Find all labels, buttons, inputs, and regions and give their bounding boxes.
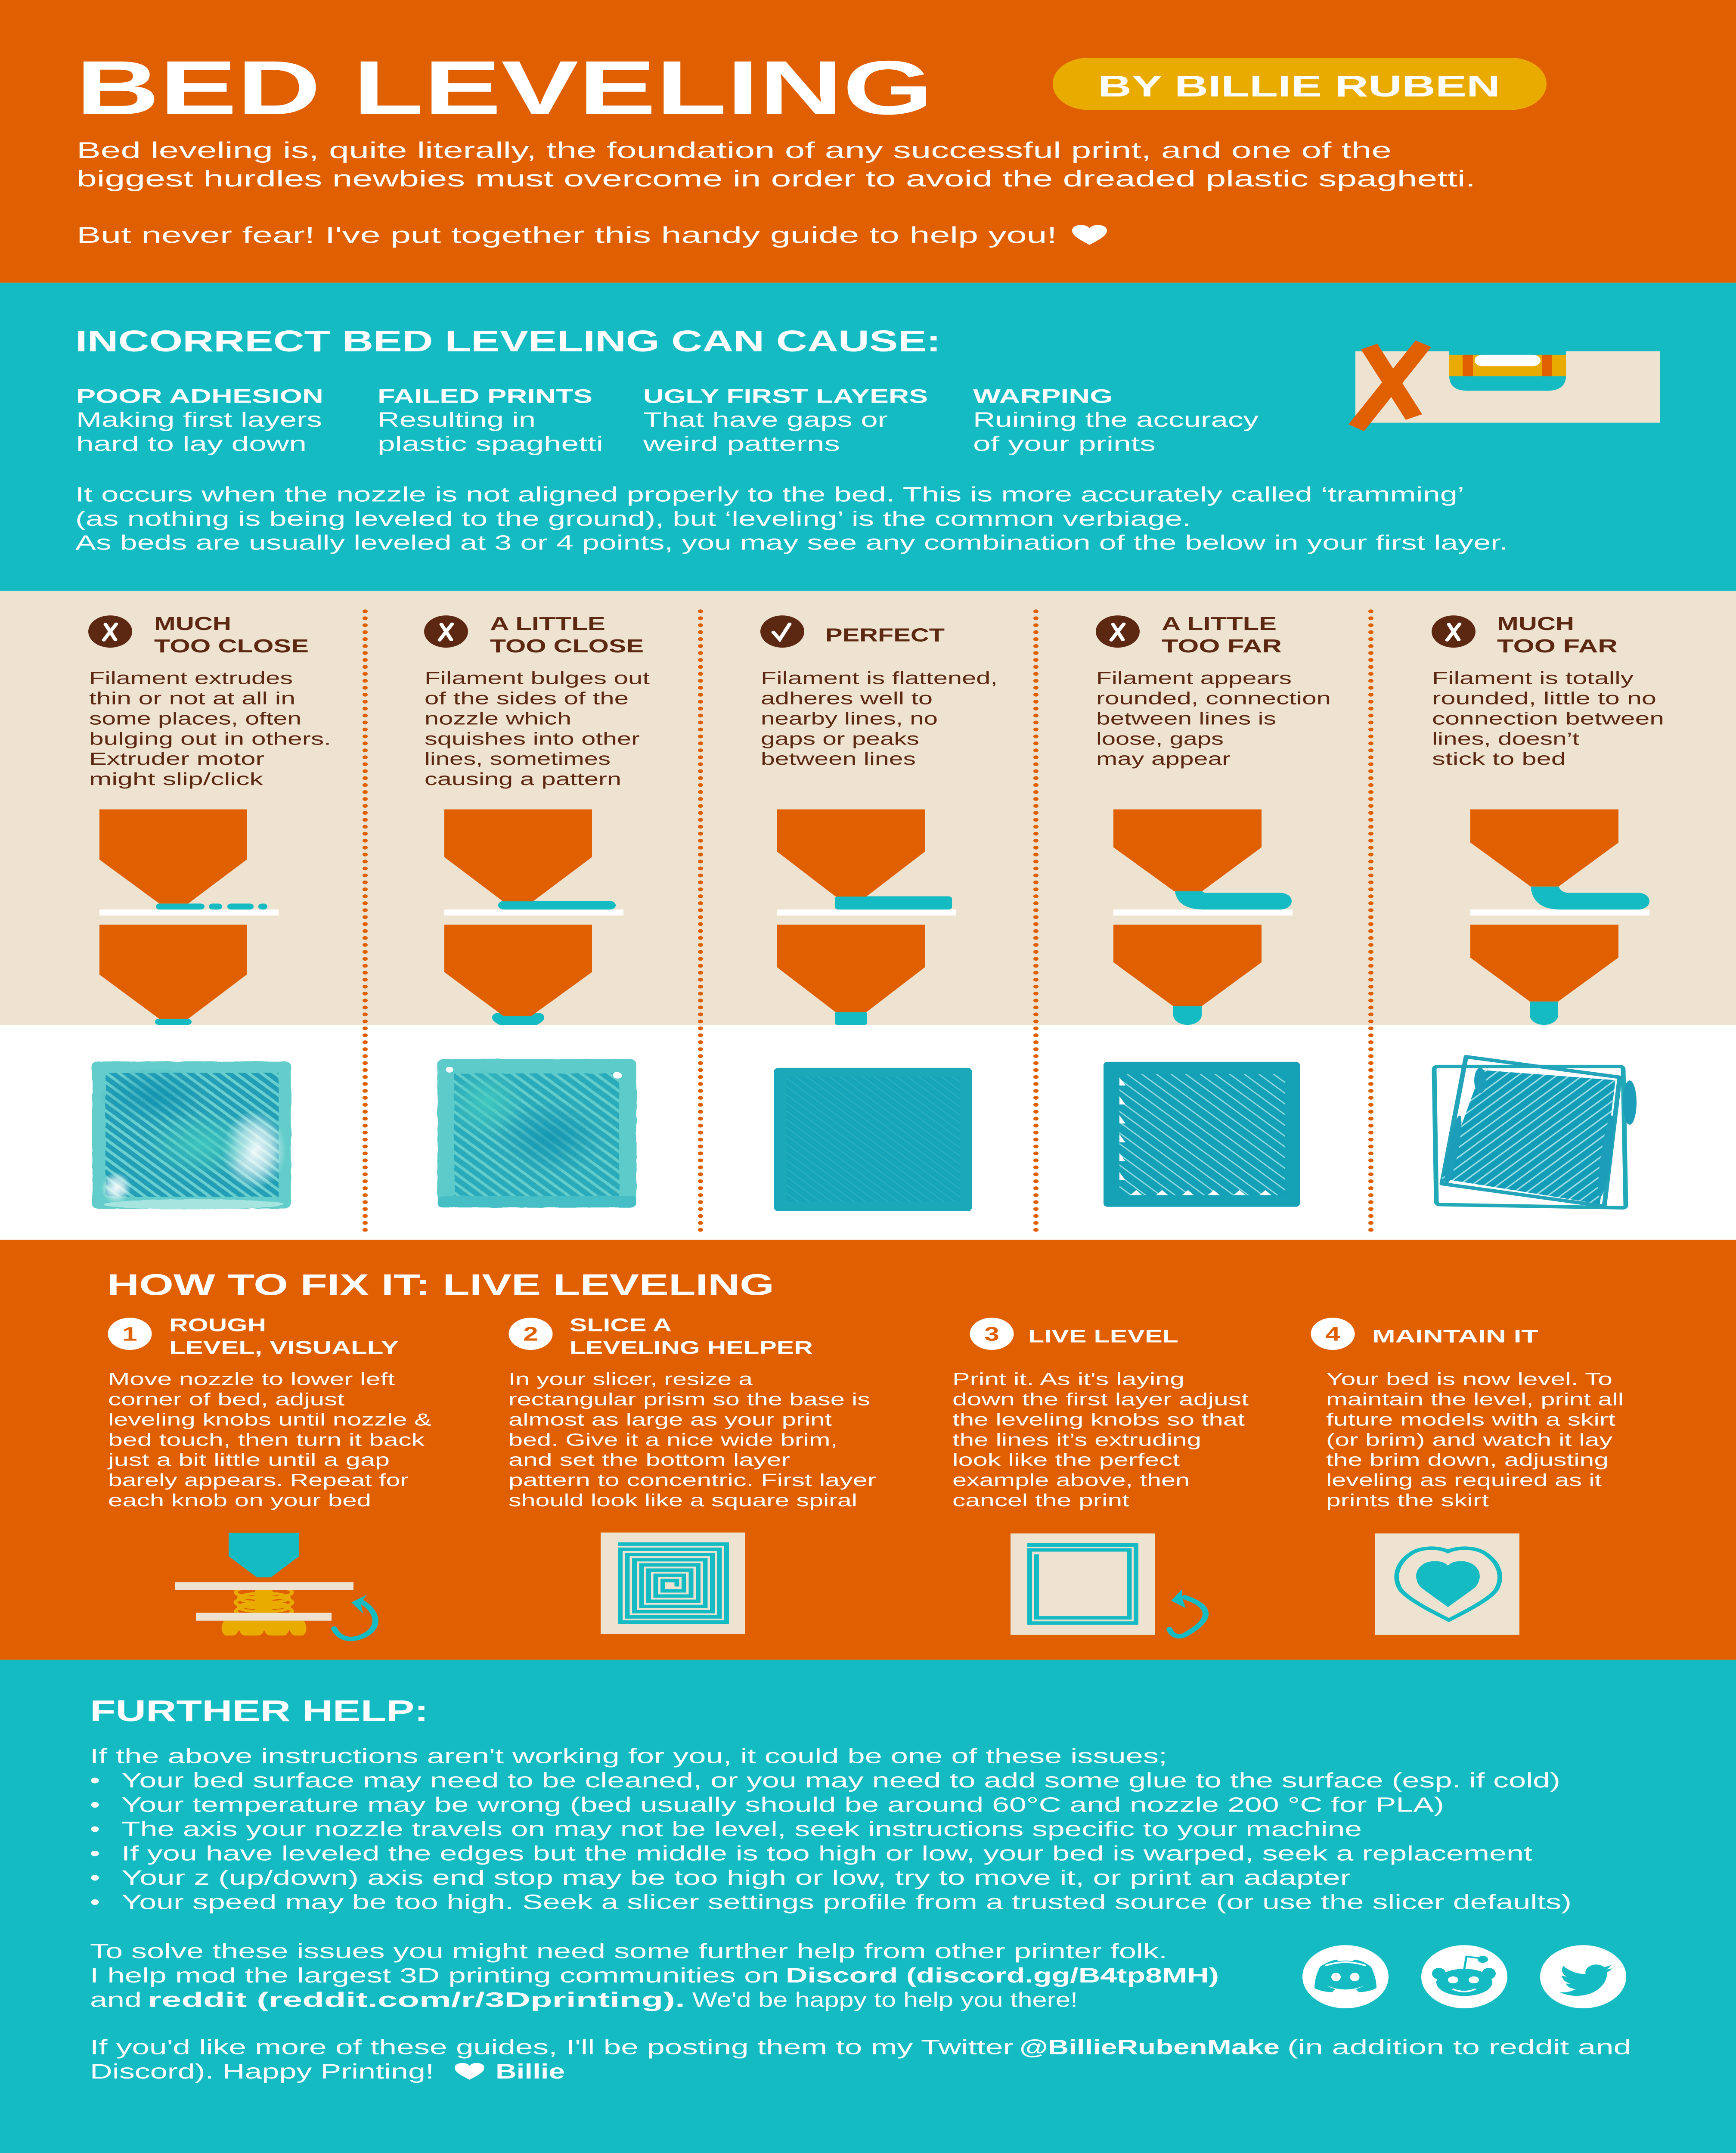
step 1 text	[107, 1369, 431, 1510]
step 1	[107, 1315, 431, 1639]
description: Filament is flattened,	[761, 668, 998, 688]
explanation paragraph: It occurs when the nozzle is not aligned properly to the bed. This is more accurately called ‘tramming’	[75, 483, 1464, 506]
cause: poor adhesion	[76, 385, 323, 456]
community text: I help mod the largest 3D printing communities on	[90, 1964, 779, 1987]
description	[1096, 668, 1331, 769]
step 2 text	[508, 1369, 876, 1510]
step 2	[508, 1315, 876, 1634]
step 1 text: leveling knobs until nozzle &	[108, 1410, 431, 1430]
step 4 text: leveling as required as it	[1326, 1470, 1602, 1490]
troubleshooting list: Your bed surface may need to be cleaned, or you may need to add some glue to the surface (esp. if cold)	[121, 1769, 1560, 1792]
step 4 text: prints the skirt	[1326, 1491, 1489, 1510]
heading	[1162, 613, 1282, 657]
community text: Discord (discord.gg/B4tp8MH)	[786, 1964, 1219, 1987]
diagram: side view extruding	[444, 810, 623, 915]
author badge: BY BILLIE RUBEN	[1098, 69, 1500, 103]
closing text: Billie	[496, 2060, 565, 2083]
description: squishes into other	[425, 729, 640, 748]
step 4 text	[1326, 1369, 1624, 1510]
intro text: Bed leveling is, quite literally, the foundation of any successful print, and one of the	[77, 138, 1392, 163]
troubleshooting list: •	[90, 1818, 100, 1841]
explanation paragraph	[75, 483, 1508, 554]
step 3 text: Print it. As it's laying	[952, 1369, 1184, 1389]
step 3 text: down the first layer adjust	[952, 1390, 1249, 1409]
panel: header	[76, 45, 1547, 248]
heading: TOO CLOSE	[154, 636, 309, 657]
description: might slip/click	[89, 769, 264, 789]
icon: small heart	[455, 2063, 484, 2080]
description: of the sides of the	[425, 689, 629, 708]
closing text: @BillieRubenMake	[1020, 2036, 1280, 2059]
cause: poor adhesion: POOR ADHESION	[76, 385, 323, 407]
diagram: front view	[777, 924, 925, 1025]
icon: first layer outline	[1011, 1533, 1155, 1635]
step 3 text	[952, 1369, 1249, 1510]
diagram: front view	[1113, 924, 1262, 1025]
panel: incorrect leveling causes	[75, 324, 1660, 554]
description: rounded, connection	[1096, 689, 1331, 708]
step 4 text: the brim down, adjusting	[1326, 1450, 1609, 1470]
step 3 heading: LIVE LEVEL	[1028, 1326, 1178, 1346]
heading: A LITTLE	[1162, 613, 1277, 634]
step 1 heading: LEVEL, VISUALLY	[169, 1337, 399, 1358]
cause: poor adhesion: Making first layers	[76, 409, 322, 431]
description: stick to bed	[1432, 749, 1566, 769]
title: BED LEVELING	[76, 45, 933, 130]
dotted column dividers	[365, 611, 1371, 1233]
intro text: biggest hurdles newbies must overcome in order to avoid the dreaded plastic spaghetti.	[77, 166, 1476, 192]
troubleshooting list: •	[90, 1842, 100, 1865]
step 4 heading: MAINTAIN IT	[1372, 1326, 1538, 1346]
photo: much too far print	[1434, 1057, 1637, 1208]
description	[761, 668, 998, 769]
description: causing a pattern	[425, 769, 621, 789]
cause: failed prints: Resulting in	[378, 409, 536, 431]
description: Extruder motor	[89, 749, 264, 769]
heading: MUCH	[1497, 613, 1574, 634]
step 3 number	[970, 1318, 1014, 1350]
step 2 text: almost as large as your print	[508, 1410, 832, 1430]
step 2 number: 2	[523, 1323, 538, 1345]
heading	[154, 613, 309, 657]
cause: failed prints: FAILED PRINTS	[378, 385, 592, 407]
description: lines, doesn’t	[1432, 729, 1579, 748]
description: Filament bulges out	[425, 668, 650, 688]
step 2 text: In your slicer, resize a	[508, 1369, 753, 1389]
cause: warping: of your prints	[973, 432, 1156, 456]
icons: twitter	[1540, 1945, 1626, 2008]
intro text	[77, 138, 1476, 248]
icon: leveling knob under nozzle	[175, 1533, 353, 1635]
description: nearby lines, no	[761, 709, 938, 729]
icon: heart skirt	[1375, 1533, 1519, 1635]
icon: square spiral skirt	[601, 1533, 745, 1634]
arrow: turn knob	[1169, 1589, 1206, 1636]
cause: warping: Ruining the accuracy	[973, 409, 1259, 431]
step 2 text: and set the bottom layer	[508, 1450, 790, 1470]
cause: failed prints: plastic spaghetti	[378, 432, 603, 456]
heading	[1497, 613, 1618, 657]
author badge	[1053, 58, 1547, 110]
description: bulging out in others.	[89, 729, 331, 748]
step 2 heading: SLICE A	[570, 1315, 672, 1335]
closing text: Discord). Happy Printing!	[90, 2060, 434, 2083]
description: nozzle which	[425, 709, 571, 729]
heading: causes: INCORRECT BED LEVELING CAN CAUSE:	[75, 324, 941, 358]
cause: ugly first layers: weird patterns	[643, 432, 840, 456]
step 3 number: 3	[984, 1323, 999, 1345]
troubleshooting list: If you have leveled the edges but the middle is too high or low, your bed is warped, seek a replacement	[121, 1842, 1532, 1865]
step 2 text: bed. Give it a nice wide brim,	[508, 1430, 837, 1450]
closing text	[90, 2036, 1631, 2083]
heading: MUCH	[154, 613, 231, 634]
community text	[90, 1940, 1219, 2011]
step 2 text: rectangular prism so the base is	[508, 1390, 870, 1409]
step 1 text: corner of bed, adjust	[108, 1390, 344, 1409]
icon: cross badge	[1096, 615, 1140, 648]
heading: TOO FAR	[1162, 636, 1282, 657]
cause: ugly first layers: That have gaps or	[643, 409, 888, 431]
diagram: side view extruding	[1113, 810, 1293, 915]
step 3 text: cancel the print	[952, 1491, 1129, 1510]
icon: cross badge	[88, 615, 132, 648]
icons: discord	[1302, 1945, 1389, 2008]
step 3 text: look like the perfect	[952, 1450, 1180, 1470]
description: gaps or peaks	[761, 729, 919, 748]
troubleshooting list: Your temperature may be wrong (bed usually should be around 60°C and nozzle 200 °C for PLA)	[121, 1793, 1444, 1817]
troubleshooting list: •	[90, 1769, 100, 1792]
heading: how to fix it: HOW TO FIX IT: LIVE LEVELING	[107, 1268, 774, 1301]
explanation paragraph: (as nothing is being leveled to the ground), but ‘leveling’ is the common verbiage.	[75, 507, 1191, 530]
cause: ugly first layers	[643, 385, 928, 456]
description	[1432, 668, 1664, 769]
cause: failed prints	[378, 385, 603, 456]
cause: poor adhesion: hard to lay down	[76, 432, 307, 456]
cause: warping	[973, 385, 1259, 456]
step 1 heading: ROUGH	[169, 1315, 266, 1335]
step 1 heading	[169, 1315, 399, 1358]
step 2 number	[509, 1318, 553, 1350]
diagram: front view	[99, 924, 247, 1025]
heading	[490, 613, 644, 657]
step 1 text: just a bit little until a gap	[107, 1450, 390, 1470]
photo: a little too far print	[1104, 1062, 1300, 1207]
step 4 number	[1311, 1318, 1355, 1350]
heading: TOO FAR	[1497, 636, 1618, 657]
photo: a little too close print	[437, 1059, 636, 1207]
step 4 text: maintain the level, print all	[1326, 1390, 1624, 1409]
step 2 text: should look like a square spiral	[508, 1491, 857, 1510]
step 4	[1311, 1318, 1624, 1635]
description: may appear	[1096, 749, 1231, 769]
step 2 heading	[570, 1315, 813, 1358]
troubleshooting list: •	[90, 1891, 100, 1914]
diagram: side view extruding	[99, 810, 279, 915]
closing text: (in addition to reddit and	[1287, 2036, 1631, 2059]
step 3 text: the lines it’s extruding	[952, 1430, 1201, 1450]
panel: further help	[90, 1694, 1631, 2083]
step 1 text: Move nozzle to lower left	[108, 1369, 395, 1389]
cause: ugly first layers: UGLY FIRST LAYERS	[643, 385, 928, 407]
step 4 number: 4	[1325, 1323, 1340, 1345]
step 4 text: Your bed is now level. To	[1326, 1369, 1612, 1389]
description: Filament is totally	[1432, 668, 1634, 688]
diagram: front view	[444, 924, 592, 1025]
step 1 text: bed touch, then turn it back	[108, 1430, 425, 1450]
description: connection between	[1432, 709, 1664, 729]
icon: crossed out spirit level	[1355, 344, 1660, 428]
diagram: front view	[1470, 924, 1618, 1025]
step 4 text: (or brim) and watch it lay	[1326, 1430, 1613, 1450]
troubleshooting list: •	[90, 1793, 100, 1817]
icon: cross badge	[424, 615, 468, 648]
description: rounded, little to no	[1432, 689, 1656, 708]
panel: much too close	[88, 613, 331, 1025]
step 1 text: each knob on your bed	[108, 1491, 371, 1510]
description: lines, sometimes	[425, 749, 611, 769]
description: thin or not at all in	[89, 689, 295, 708]
heading: further help: FURTHER HELP:	[90, 1694, 428, 1728]
description: between lines is	[1096, 709, 1276, 729]
photo: perfect print	[774, 1068, 972, 1211]
step 3	[952, 1318, 1249, 1636]
panel: how to fix it	[107, 1268, 1624, 1639]
panel: a little too close	[424, 613, 650, 1025]
icons: reddit	[1421, 1945, 1507, 2008]
cause: warping: WARPING	[973, 385, 1113, 407]
description	[425, 668, 650, 789]
panel: much too far	[1432, 613, 1664, 1025]
heading: PERFECT	[825, 624, 945, 645]
heading: TOO CLOSE	[490, 636, 644, 657]
description	[89, 668, 331, 789]
troubleshooting list: The axis your nozzle travels on may not be level, seek instructions specific to your machine	[121, 1818, 1362, 1841]
step 4 text: future models with a skirt	[1326, 1410, 1615, 1430]
closing text: If you'd like more of these guides, I'll be posting them to my Twitter	[90, 2036, 1014, 2059]
step 3 text: example above, then	[952, 1470, 1190, 1490]
icon: heart	[1072, 225, 1107, 245]
troubleshooting list: •	[90, 1866, 100, 1889]
icon: check badge	[760, 615, 804, 648]
diagram: side view extruding	[1470, 810, 1649, 915]
arrow: turn knob	[334, 1595, 375, 1639]
intro text: But never fear! I've put together this handy guide to help you!	[77, 223, 1057, 248]
community text: and	[90, 1989, 142, 2011]
step 2 heading: LEVELING HELPER	[570, 1337, 813, 1358]
step 2 text: pattern to concentric. First layer	[508, 1470, 876, 1490]
community text: We'd be happy to help you there!	[692, 1989, 1078, 2011]
diagram: side view extruding	[777, 810, 956, 915]
explanation paragraph: As beds are usually leveled at 3 or 4 points, you may see any combination of the below in your first layer.	[75, 531, 1508, 554]
community text: To solve these issues you might need some further help from other printer folk.	[90, 1940, 1167, 1963]
panel: a little too far	[1096, 613, 1331, 1025]
description: adheres well to	[761, 689, 933, 708]
troubleshooting list: Your speed may be too high. Seek a slicer settings profile from a trusted source (or use the slicer defaults)	[121, 1891, 1572, 1914]
description: Filament extrudes	[89, 668, 293, 688]
troubleshooting list: If the above instructions aren't working for you, it could be one of these issues;	[90, 1745, 1167, 1768]
step 3 text: the leveling knobs so that	[952, 1410, 1245, 1430]
panel: perfect	[760, 615, 998, 1025]
description: loose, gaps	[1096, 729, 1224, 748]
step 1 text: barely appears. Repeat for	[108, 1470, 409, 1490]
troubleshooting list	[90, 1745, 1572, 1914]
heading: A LITTLE	[490, 613, 605, 634]
step 1 number: 1	[122, 1323, 137, 1345]
community text: reddit (reddit.com/r/3Dprinting).	[148, 1989, 685, 2011]
icon: cross badge	[1432, 615, 1476, 648]
photo: much too close print	[92, 1061, 291, 1210]
step 1 number	[108, 1318, 152, 1350]
troubleshooting list: Your z (up/down) axis end stop may be too high or low, try to move it, or print an adapter	[121, 1866, 1351, 1889]
description: Filament appears	[1096, 668, 1292, 688]
description: some places, often	[89, 709, 301, 729]
description: between lines	[761, 749, 916, 769]
